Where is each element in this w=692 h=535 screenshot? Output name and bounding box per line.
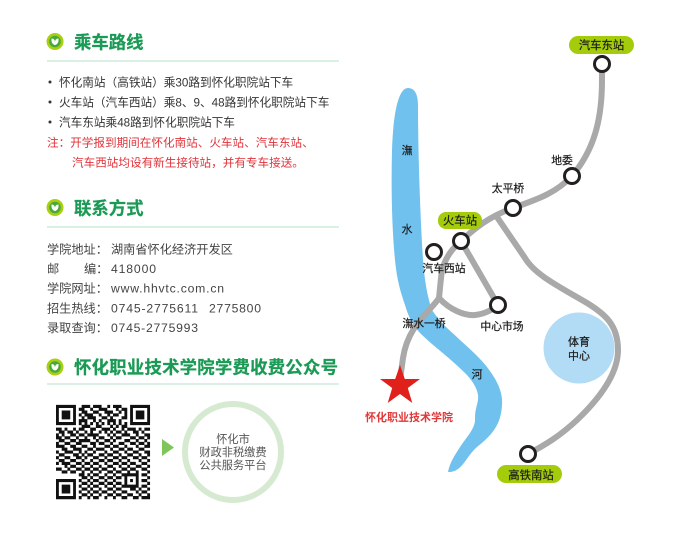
river labels: 河 xyxy=(472,368,483,381)
route lines xyxy=(400,64,618,454)
river xyxy=(392,88,502,472)
station: west bus: 汽车西站 xyxy=(422,261,466,275)
station: high speed rail south xyxy=(497,446,562,483)
station: central market: 中心市场 xyxy=(480,319,524,333)
arrow: QR to platform xyxy=(162,439,174,456)
text block: red note: 汽车西站均设有新生接待站，并有专车接送。 xyxy=(72,155,304,169)
text block: route list: 汽车东站乘48路到怀化职院站下车 xyxy=(59,115,235,129)
text block: red note: 注：开学报到期间在怀化南站、火车站、汽车东站、 xyxy=(47,135,314,149)
text block: contact details: 邮 xyxy=(47,262,59,276)
star: college xyxy=(380,365,420,403)
text block: contact details: 0745-2775611 xyxy=(111,302,198,316)
text block: contact details: www.hhvtc.com.cn xyxy=(110,282,224,296)
QR code xyxy=(56,406,150,498)
station: east bus: 汽车东站 xyxy=(579,38,624,52)
icon: leaf badge routes xyxy=(46,33,64,50)
station: taiping bridge xyxy=(492,182,524,216)
label: college: 怀化职业技术学院 xyxy=(365,410,453,424)
panel: bus routes xyxy=(46,32,339,169)
badge: public service platform xyxy=(185,404,281,500)
text block: contact details: 0745-2775993 xyxy=(111,321,198,335)
river labels: 水 xyxy=(402,223,413,236)
station: central market xyxy=(480,298,524,333)
text block: red note xyxy=(47,135,314,169)
text block: contact details: 学院地址： xyxy=(47,241,108,256)
badge: public service platform: 财政非税缴费 xyxy=(199,445,267,459)
station: west bus xyxy=(422,244,466,275)
panel: contact xyxy=(46,198,339,335)
sports centre xyxy=(544,312,614,384)
heading: contact: 联系方式 xyxy=(74,198,144,218)
text block: route list xyxy=(48,75,329,129)
station: railway xyxy=(438,212,482,248)
text block: contact details: 2775800 xyxy=(209,302,261,316)
station: diwei xyxy=(551,154,580,184)
station: diwei: 地委 xyxy=(551,154,573,167)
river labels xyxy=(402,143,483,381)
text block: contact details: 湖南省怀化经济开发区 xyxy=(111,241,233,256)
heading: fee account: 怀化职业技术学院学费收费公众号 xyxy=(74,358,338,378)
label: bridge: 潕水一桥 xyxy=(402,316,446,330)
heading: routes: 乘车路线 xyxy=(74,32,144,52)
panel: fee account xyxy=(46,358,339,500)
text block: route list: 火车站（汽车西站）乘8、9、48路到怀化职院站下车 xyxy=(59,95,329,109)
station: taiping bridge: 太平桥 xyxy=(492,182,524,195)
text block: contact details: 学院网址： xyxy=(47,281,108,296)
text block: contact details: 418000 xyxy=(111,262,156,276)
sports centre: 体育 xyxy=(568,334,590,348)
sports centre: 中心 xyxy=(568,350,590,362)
text block: route list: 怀化南站（高铁站）乘30路到怀化职院站下车 xyxy=(59,75,293,89)
badge: public service platform: 公共服务平台 xyxy=(199,458,267,472)
icon: leaf badge fee account xyxy=(46,358,64,376)
text block: contact details: 招生热线： xyxy=(47,302,108,316)
station: east bus xyxy=(569,36,634,72)
badge: public service platform: 怀化市 xyxy=(216,432,250,446)
text block: contact details: 录取查询： xyxy=(47,321,108,335)
icon: leaf badge contact xyxy=(46,199,64,216)
text block: contact details: 编： xyxy=(84,261,108,276)
text block: contact details xyxy=(47,241,261,335)
station: railway: 火车站 xyxy=(443,214,477,228)
river labels: 潕 xyxy=(402,143,413,157)
station: high speed rail south: 高铁南站 xyxy=(508,468,554,482)
panel: route map xyxy=(365,36,634,483)
